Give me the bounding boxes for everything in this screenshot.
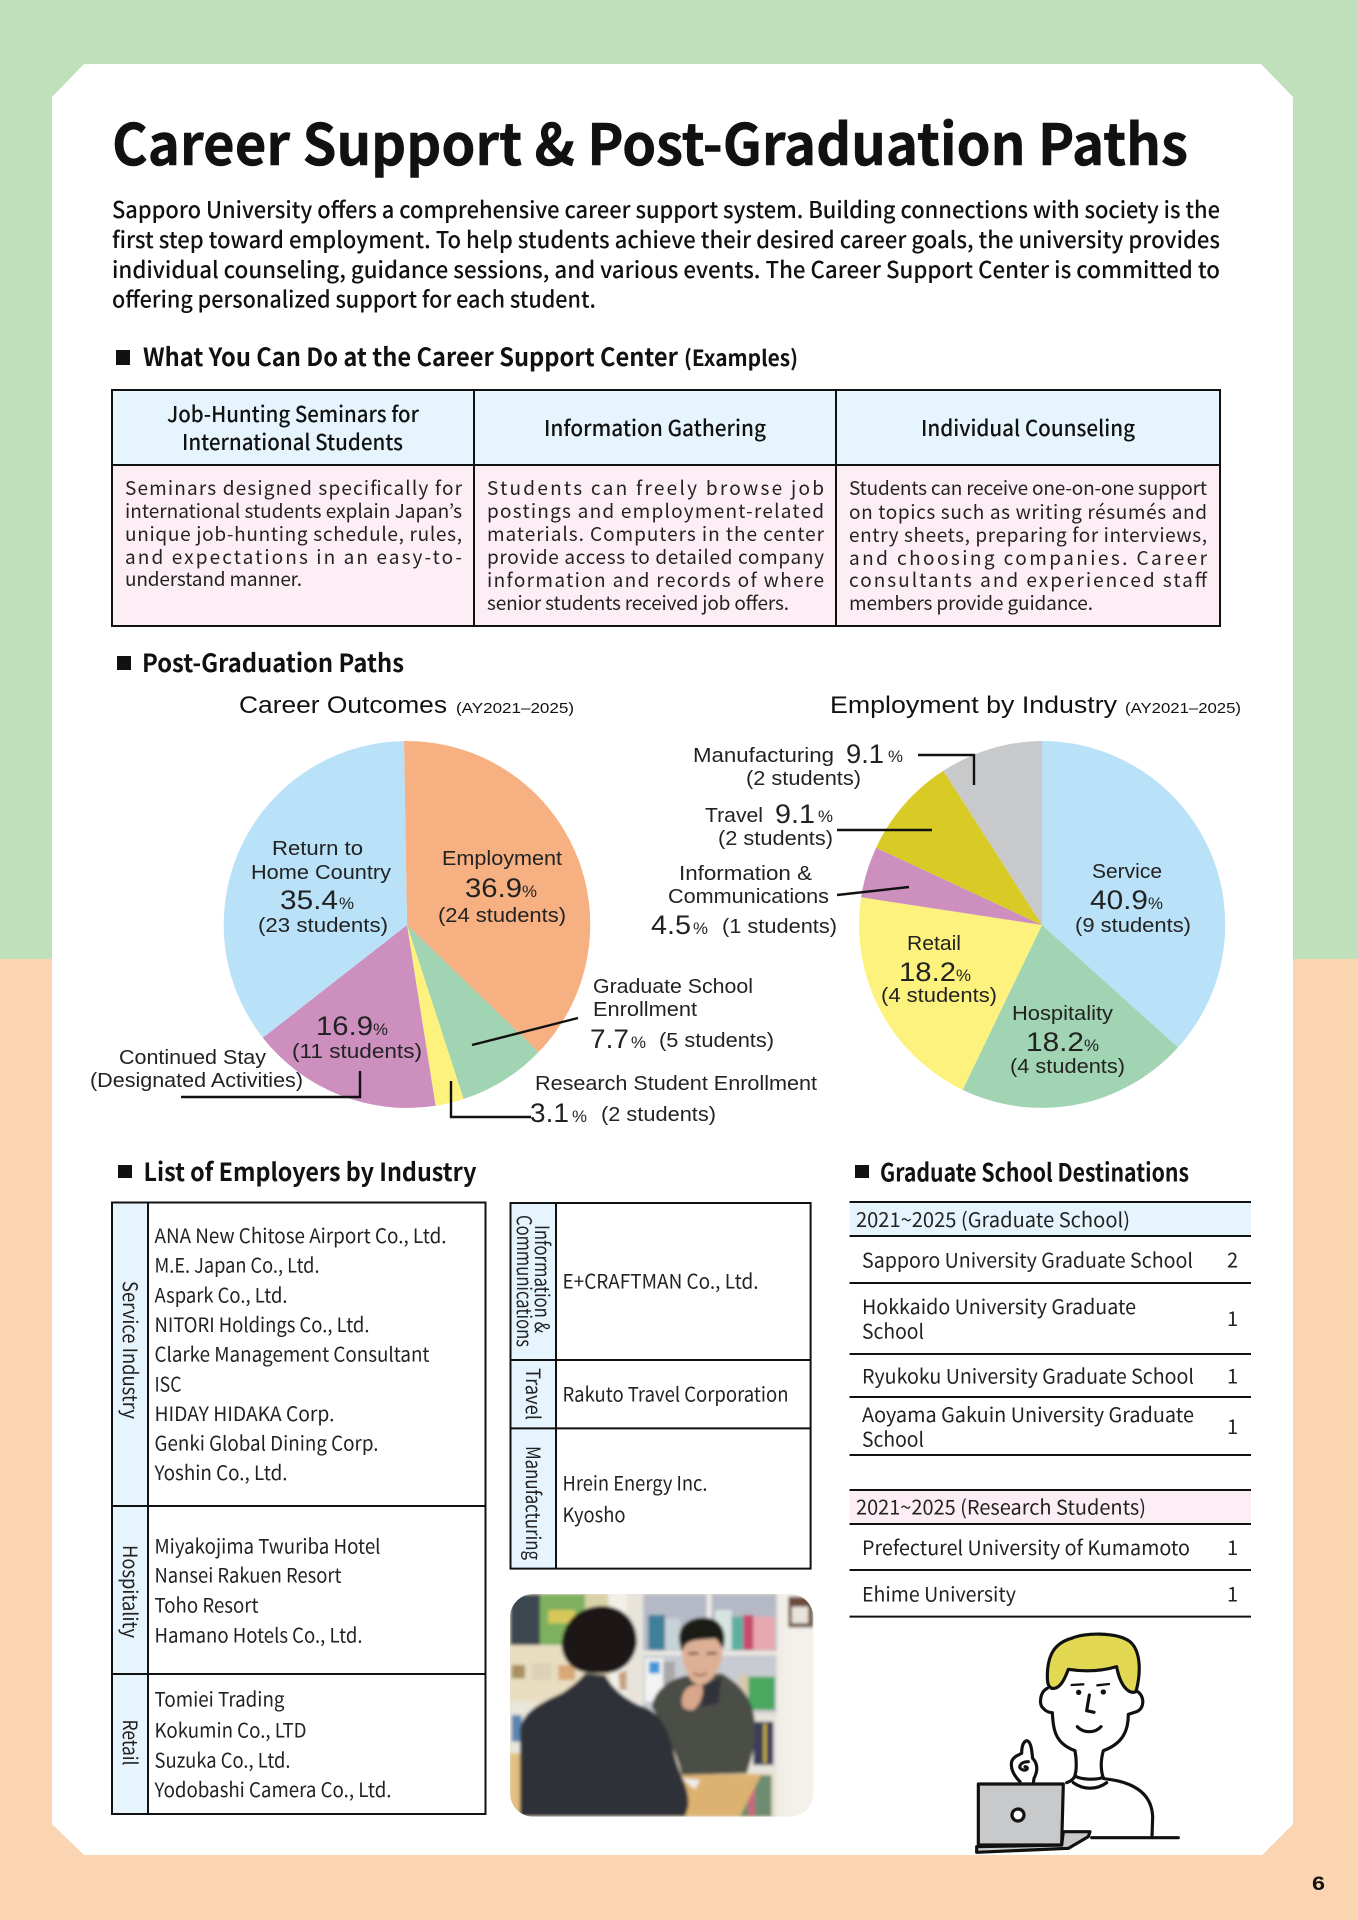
row: service industry: HIDAY HIDAKA Corp. <box>154 1398 334 1427</box>
icon: student with laptop <box>977 1634 1178 1852</box>
chart title: career outcomes <box>239 692 574 719</box>
column: information gathering: Information Gathering <box>544 411 766 443</box>
row: hokkaido university: 1 <box>1227 1303 1238 1332</box>
intro paragraph: first step toward employment. To help students achieve their desired career goals, the university provides <box>112 221 1220 255</box>
row: travel: Rakuto Travel Corporation <box>562 1379 788 1408</box>
row: information and communications: E+CRAFTMAN Co., Ltd. <box>562 1266 758 1295</box>
slice: research student <box>407 925 464 1106</box>
row: service industry: ANA New Chitose Airport Co., Ltd. <box>154 1220 446 1249</box>
heading: graduate school destinations: Graduate School Destinations <box>880 1154 1189 1190</box>
column: information gathering: senior students received job offers. <box>487 589 789 616</box>
row: hospitality: Hamano Hotels Co., Ltd. <box>154 1620 362 1648</box>
slice: retail <box>859 897 1042 1090</box>
label: service: 40.9 <box>1090 885 1148 915</box>
label with leader: graduate school enrollment: Enrollment <box>593 999 697 1021</box>
row: service industry: NITORI Holdings Co., Ltd. <box>154 1309 370 1338</box>
column: individual counseling: Individual Counseling <box>921 411 1135 443</box>
label with leader: continued stay: (11 students) <box>292 1041 422 1063</box>
column: information gathering: information and records of where <box>487 566 824 593</box>
row: retail: Suzuka Co., Ltd. <box>154 1744 290 1774</box>
label: retail: % <box>956 966 971 985</box>
label with leader: information and communications: 4.5 <box>651 910 691 940</box>
row: hokkaido university: School <box>862 1316 924 1344</box>
row: hokkaido university <box>862 1291 1238 1344</box>
slice: travel <box>876 771 1042 925</box>
label: service: % <box>1148 894 1163 913</box>
label: return to home country <box>251 838 391 937</box>
label with leader: travel: 9.1 <box>775 799 815 829</box>
column: job-hunting seminars <box>125 397 463 592</box>
slice: information and communications <box>861 848 1042 925</box>
slice: employment <box>404 741 590 1052</box>
label: hospitality: % <box>1084 1036 1099 1055</box>
label with leader: travel: (2 students) <box>718 828 833 850</box>
intro paragraph: offering personalized support for each student. <box>112 280 596 314</box>
label: hospitality: 18.2 <box>1026 1027 1084 1057</box>
chart title: employment by industry: Employment by Industry <box>830 692 1117 719</box>
label with leader: information and communications: % <box>693 919 708 938</box>
label: return to home country: Return to <box>272 838 363 860</box>
label: retail <box>881 933 997 1007</box>
row: hospitality: Nansei Rakuen Resort <box>154 1560 342 1588</box>
label: service: (9 students) <box>1075 915 1191 937</box>
row: information and communications <box>511 1215 758 1347</box>
row: service industry: Yoshin Co., Ltd. <box>154 1457 288 1486</box>
intro paragraph <box>112 191 1220 314</box>
label with leader: travel: Travel <box>705 805 763 827</box>
row: hospitality <box>117 1530 380 1648</box>
label: return to home country: % <box>339 894 354 913</box>
pie chart: career outcomes <box>224 741 590 1108</box>
title: Career Support & Post-Graduation Paths <box>112 100 1188 182</box>
row: information and communications: Communications <box>511 1215 540 1347</box>
slice: service <box>1042 741 1225 1047</box>
employers table: right <box>510 1203 811 1569</box>
label: employment <box>438 848 566 927</box>
row: retail <box>117 1684 392 1803</box>
label with leader: continued stay: Continued Stay <box>119 1047 266 1069</box>
row: service industry: Clarke Management Consultant <box>154 1338 430 1368</box>
column: information gathering: provide access to detailed company <box>487 543 824 570</box>
row: aoyama gakuin university: Aoyama Gakuin University Graduate <box>862 1399 1194 1428</box>
label with leader: graduate school enrollment: % <box>631 1033 646 1052</box>
heading: list of employers: List of Employers by Industry <box>144 1153 477 1189</box>
label: employment: (24 students) <box>438 905 566 927</box>
column: job-hunting seminars: unique job-hunting schedule, rules, <box>125 520 462 547</box>
column: individual counseling: members provide guidance. <box>849 589 1093 616</box>
row: ryukoku university: 1 <box>1227 1360 1238 1390</box>
label with leader: manufacturing: % <box>888 747 903 766</box>
row: service industry <box>117 1220 446 1486</box>
heading: what you can do: What You Can Do at the Career Support Center <box>143 338 678 374</box>
label with leader: manufacturing: (2 students) <box>746 768 861 790</box>
row: sapporo university: 2 <box>1227 1244 1238 1274</box>
column: job-hunting seminars: international students explain Japan’s <box>125 497 462 524</box>
slice: continued stay <box>263 925 436 1108</box>
heading: post-graduation paths: Post-Graduation Paths <box>142 644 404 680</box>
row: hospitality: Toho Resort <box>154 1590 259 1618</box>
column: job-hunting seminars: Seminars designed specifically for <box>125 474 463 501</box>
row: ehime university: Ehime University <box>862 1578 1017 1608</box>
column: job-hunting seminars: Job-Hunting Seminars for <box>167 397 420 429</box>
label with leader: graduate school enrollment: Graduate School <box>593 976 753 998</box>
label with leader: graduate school enrollment: 7.7 <box>590 1024 629 1054</box>
employers table: left <box>112 1202 486 1814</box>
row: service industry: ISC <box>154 1368 182 1398</box>
chart title: employment by industry: (AY2021–2025) <box>1125 700 1241 717</box>
row: aoyama gakuin university: School <box>862 1424 924 1452</box>
column: individual counseling: entry sheets, preparing for interviews, <box>849 521 1207 548</box>
band: graduate school header: 2021~2025 (Graduate School) <box>856 1204 1130 1233</box>
chart title: career outcomes: (AY2021–2025) <box>456 700 574 717</box>
band: research students header: 2021~2025 (Research Students) <box>856 1492 1146 1520</box>
label with leader: continued stay: (Designated Activities) <box>90 1070 303 1092</box>
label: return to home country: Home Country <box>251 862 391 884</box>
row: retail: Retail <box>117 1720 146 1766</box>
row: information and communications: Information & <box>529 1225 558 1333</box>
row: ehime university: 1 <box>1227 1578 1238 1608</box>
row: prefecturel university of kumamoto: 1 <box>1227 1532 1238 1561</box>
label: hospitality: (4 students) <box>1010 1056 1125 1078</box>
row: retail: Yodobashi Camera Co., Ltd. <box>154 1774 392 1803</box>
row: retail: Kokumin Co., LTD <box>154 1714 306 1744</box>
label with leader: research student enrollment: Research Student Enrollment <box>535 1073 817 1095</box>
label with leader: manufacturing <box>693 739 974 790</box>
label with leader: manufacturing: 9.1 <box>846 739 884 769</box>
label with leader: continued stay <box>90 1011 422 1097</box>
column: information gathering: materials. Computers in the center <box>487 520 825 547</box>
column: individual counseling: on topics such as writing résumés and <box>849 498 1207 525</box>
row: ehime university <box>862 1578 1238 1608</box>
label with leader: continued stay: % <box>373 1020 388 1039</box>
slice: manufacturing <box>943 741 1042 925</box>
label with leader: information and communications: (1 students) <box>722 916 837 938</box>
row: aoyama gakuin university <box>862 1399 1238 1452</box>
column: information gathering: Students can freely browse job <box>487 474 824 501</box>
row: sapporo university: Sapporo University Graduate School <box>862 1244 1193 1274</box>
row: prefecturel university of kumamoto: Prefecturel University of Kumamoto <box>862 1532 1190 1561</box>
row: service industry: Genki Global Dining Corp. <box>154 1428 378 1456</box>
column: individual counseling <box>849 411 1208 616</box>
label: retail: 18.2 <box>899 957 956 987</box>
row: travel <box>520 1368 788 1420</box>
label with leader: graduate school enrollment: (5 students) <box>659 1030 774 1052</box>
column: job-hunting seminars: and expectations in an easy-to- <box>125 543 462 570</box>
intro paragraph: individual counseling, guidance sessions, and various events. The Career Support Center is committed to <box>112 251 1220 285</box>
graduate school table <box>850 1202 1251 1617</box>
intro paragraph: Sapporo University offers a comprehensive career support system. Building connections with society is the <box>112 191 1220 225</box>
label: employment: Employment <box>442 848 562 870</box>
row: manufacturing <box>520 1446 708 1560</box>
pie chart: employment by industry <box>859 741 1225 1108</box>
label: service <box>1075 861 1191 937</box>
label: return to home country: 35.4 <box>280 885 338 915</box>
label with leader: research student enrollment: 3.1 <box>530 1098 569 1128</box>
column: information gathering <box>487 411 825 616</box>
row: ryukoku university: Ryukoku University Graduate School <box>862 1360 1194 1390</box>
label: hospitality: Hospitality <box>1012 1003 1113 1025</box>
row: service industry: M.E. Japan Co., Ltd. <box>154 1250 320 1278</box>
row: service industry: Service Industry <box>117 1281 146 1420</box>
label with leader: travel: % <box>818 807 833 826</box>
label with leader: information and communications <box>651 863 909 940</box>
row: retail: Tomiei Trading <box>154 1684 284 1712</box>
label with leader: research student enrollment: (2 students) <box>601 1104 716 1126</box>
row: manufacturing: Kyosho <box>562 1499 626 1528</box>
row: manufacturing: Manufacturing <box>520 1446 549 1560</box>
row: hospitality: Hospitality <box>117 1545 146 1639</box>
career center table <box>112 390 1220 626</box>
row: aoyama gakuin university: 1 <box>1227 1411 1238 1440</box>
label with leader: information and communications: Communications <box>668 886 829 908</box>
label with leader: continued stay: 16.9 <box>316 1011 373 1041</box>
label: employment: 36.9 <box>465 873 522 903</box>
column: individual counseling: and choosing companies. Career <box>849 544 1208 571</box>
label with leader: information and communications: Information & <box>679 863 813 885</box>
label with leader: research student enrollment <box>451 1073 817 1128</box>
label: retail: (4 students) <box>881 985 997 1007</box>
column: individual counseling: Students can receive one-on-one support <box>849 474 1207 501</box>
chart title: career outcomes: Career Outcomes <box>239 692 447 719</box>
slice: hospitality <box>963 925 1178 1108</box>
row: travel: Travel <box>520 1368 549 1420</box>
column: information gathering: postings and employment-related <box>487 497 824 524</box>
chart title: employment by industry <box>830 692 1241 719</box>
column: individual counseling: consultants and experienced staff <box>849 566 1208 593</box>
photo: counseling session <box>505 1590 818 1823</box>
label: retail: Retail <box>907 933 961 955</box>
label with leader: manufacturing: Manufacturing <box>693 745 834 767</box>
label: service: Service <box>1092 861 1162 883</box>
column: job-hunting seminars: International Students <box>182 425 403 457</box>
column: job-hunting seminars: understand manner. <box>125 565 302 592</box>
label with leader: travel <box>705 799 932 850</box>
row: hospitality: Miyakojima Twuriba Hotel <box>154 1530 380 1560</box>
label: employment: % <box>522 882 537 901</box>
label with leader: graduate school enrollment <box>472 976 774 1054</box>
slice: return to home country <box>224 741 407 1038</box>
slice: graduate school <box>407 925 539 1099</box>
label: return to home country: (23 students) <box>258 915 388 937</box>
label: hospitality <box>1010 1003 1125 1078</box>
row: manufacturing: Hrein Energy Inc. <box>562 1468 708 1496</box>
heading: what you can do: (Examples) <box>684 341 798 373</box>
row: service industry: Aspark Co., Ltd. <box>154 1280 288 1308</box>
page number: 6 <box>1312 1874 1325 1895</box>
label with leader: research student enrollment: % <box>572 1107 587 1126</box>
row: hokkaido university: Hokkaido University Graduate <box>862 1291 1136 1320</box>
